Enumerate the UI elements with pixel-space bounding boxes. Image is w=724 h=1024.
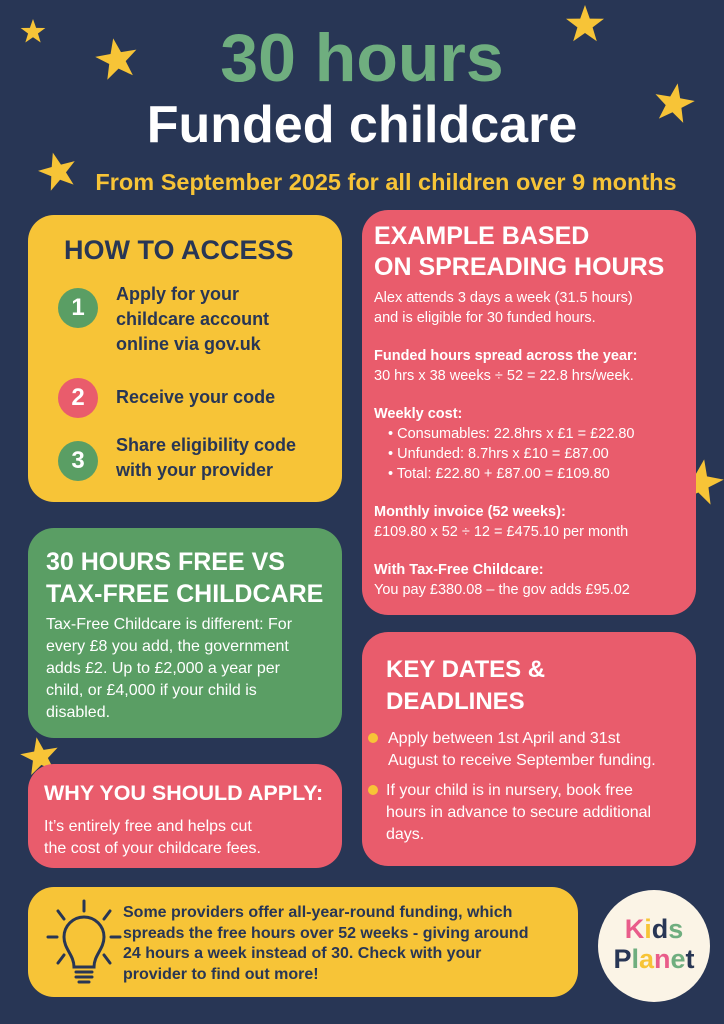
icon: lightbulb <box>46 900 122 984</box>
step 2: 2 <box>71 384 85 411</box>
panel: example: £109.80 x 52 ÷ 12 = £475.10 per month With Tax-Free Childcare: <box>374 524 628 578</box>
bullet 2: hours in advance to secure additional <box>386 804 651 821</box>
panel: 30 hours vs tax-free: child, or £4,000 if your child is <box>46 682 257 699</box>
title: 30 hours <box>220 20 504 96</box>
tip text: provider to find out more! <box>123 966 319 982</box>
panel: example: • Consumables: 22.8hrs x £1 = £22.80 <box>388 426 634 442</box>
panel: how to access: childcare account <box>116 309 269 329</box>
step 3: 3 <box>71 447 85 474</box>
panel: how to access: Apply for your <box>116 284 239 304</box>
bullet 1: August to receive September funding. <box>388 752 656 769</box>
panel: why apply: It’s entirely free and helps cut <box>44 818 252 835</box>
bullet 2: days. <box>386 826 424 843</box>
panel: example: 30 hrs x 38 weeks ÷ 52 = 22.8 hrs/week. Weekly cost: Monthly invoice (52 weeks): <box>374 368 634 520</box>
panel: 30 hours vs tax-free: disabled. <box>46 704 110 721</box>
step 3 <box>58 441 98 481</box>
tagline: From September 2025 for all children over 9 months <box>95 169 677 195</box>
subtitle heading: Funded childcare <box>147 96 577 154</box>
panel: key dates: DEADLINES <box>386 688 525 715</box>
heading: how to access: HOW TO ACCESS <box>64 235 294 265</box>
panel: example: • Total: £22.80 + £87.00 = £109.80 <box>388 466 610 482</box>
step 1: 1 <box>71 294 85 321</box>
tip text <box>123 904 528 982</box>
bullet 1: Apply between 1st April and 31st <box>388 730 620 747</box>
panel: example: ON SPREADING HOURS <box>374 253 664 281</box>
panel: example: • Unfunded: 8.7hrs x £10 = £87.00 <box>388 446 609 462</box>
tip text: 24 hours a week instead of 30. Check with your <box>123 945 481 962</box>
tip text: Some providers offer all-year-round funding, which <box>123 904 512 921</box>
bullet 2: If your child is in nursery, book free <box>386 782 633 799</box>
panel: example: You pay £380.08 – the gov adds £95.02 <box>374 582 630 598</box>
panel: example: and is eligible for 30 funded hours. Funded hours spread across the year: <box>374 310 638 364</box>
panel: bottom tip <box>28 887 578 997</box>
panel: example <box>362 210 696 615</box>
bullet 2 <box>368 782 651 843</box>
logo: kids planet: Kids <box>625 914 683 944</box>
logo: kids planet: Planet <box>613 944 695 974</box>
panel: 30 hours vs tax-free: every £8 you add, the government <box>46 638 289 655</box>
panel: why apply: WHY YOU SHOULD APPLY: <box>44 781 323 805</box>
panel: 30 hours vs tax-free: 30 HOURS FREE VS <box>46 548 285 576</box>
panel: 30 hours vs tax-free: adds £2. Up to £2,000 a year per <box>46 660 280 677</box>
panel: how to access <box>28 215 342 502</box>
panel: example: EXAMPLE BASED <box>374 222 589 250</box>
panel: how to access: Share eligibility code <box>116 435 296 455</box>
panel: key dates <box>362 632 696 866</box>
panel: how to access: Receive your code <box>116 387 275 407</box>
panel: how to access: online via gov.uk <box>116 334 261 354</box>
panel: why apply <box>28 764 342 868</box>
panel: why apply: the cost of your childcare fees. <box>44 840 261 857</box>
step 2 <box>58 378 98 418</box>
panel: example: Alex attends 3 days a week (31.5 hours) <box>374 290 633 306</box>
bullet 1 <box>368 730 656 769</box>
tip text: spreads the free hours over 52 weeks - giving around <box>123 924 528 942</box>
panel: key dates: KEY DATES & <box>386 656 545 683</box>
logo: kids planet <box>598 890 710 1002</box>
panel: how to access: with your provider <box>116 460 273 480</box>
panel: 30 hours vs tax-free <box>28 528 342 738</box>
panel: 30 hours vs tax-free: Tax-Free Childcare is different: For <box>46 616 292 633</box>
panel: 30 hours vs tax-free: TAX-FREE CHILDCARE <box>46 580 323 608</box>
step 1 <box>58 288 98 328</box>
